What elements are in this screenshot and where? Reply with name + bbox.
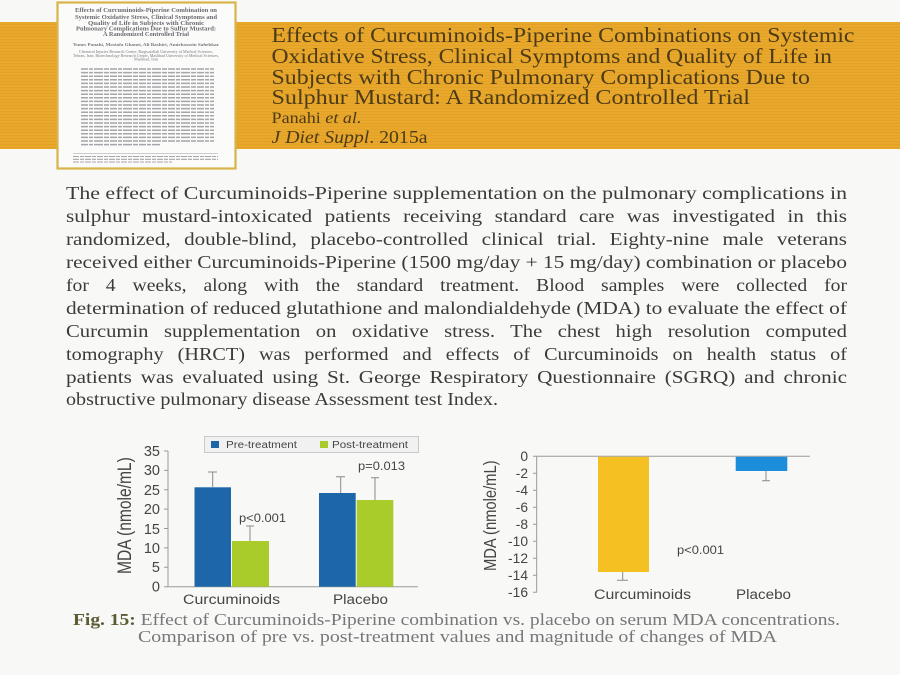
thumbnail authors <box>73 42 219 62</box>
body paragraph: determination of reduced glutathione and malondialdehyde (MDA) to evaluate the effect of <box>66 298 847 319</box>
y axis: -2 <box>516 466 528 481</box>
legend: Post-treatment <box>332 440 408 451</box>
x axis labels <box>183 592 388 607</box>
article title: Oxidative Stress, Clinical Symptoms and Quality of Life in <box>272 44 833 68</box>
body paragraph: The effect of Curcuminoids-Piperine supplementation on the pulmonary complications in <box>66 183 847 203</box>
y axis: 35 <box>144 444 160 460</box>
thumbnail authors: Mashhad, Iran <box>134 58 158 62</box>
thumbnail authors: Yunes Panahi, Mostafa Ghanei, Ali Bashiri, Amirhossein Sahebkar <box>73 42 219 47</box>
left bar chart: MDA pre vs post treatment <box>114 436 419 607</box>
y axis: 0 <box>520 449 528 464</box>
p-value: placebo: p=0.013 <box>358 461 405 473</box>
y axis: -4 <box>516 483 528 498</box>
y axis: -16 <box>508 585 528 600</box>
thumbnail footnote <box>73 154 218 162</box>
right bar chart: magnitude of changes in MDA <box>481 449 810 602</box>
article title: Sulphur Mustard: A Randomized Controlled Trial <box>272 85 750 109</box>
thumbnail abstract lines <box>81 69 214 145</box>
y axis: -8 <box>516 517 528 532</box>
thumbnail title <box>75 7 218 38</box>
y axis: 25 <box>144 483 160 499</box>
header band <box>0 22 900 149</box>
thumbnail title: A Randomized Controlled Trial <box>103 31 189 38</box>
p-value: curcuminoids: p<0.001 <box>239 513 286 525</box>
bars: Placebo <box>319 477 393 587</box>
bar: Curcuminoids <box>598 457 649 580</box>
body paragraph <box>66 183 847 409</box>
x axis labels: Placebo <box>333 592 388 607</box>
y axis: -14 <box>508 568 528 583</box>
body paragraph: received either Curcuminoids-Piperine (1500 mg/day + 15 mg/day) combination or placebo <box>66 252 847 273</box>
y axis <box>508 449 810 600</box>
y axis: 10 <box>144 541 160 557</box>
thumbnail title: Effects of Curcuminoids-Piperine Combination on <box>75 7 218 14</box>
thumbnail title: Systemic Oxidative Stress, Clinical Symptoms and <box>75 14 218 21</box>
body paragraph: patients was evaluated using St. George Respiratory Questionnaire (SGRQ) and chronic <box>66 367 847 388</box>
x axis labels <box>594 587 791 602</box>
bars: Curcuminoids <box>194 472 269 587</box>
y axis: 15 <box>144 522 160 538</box>
body paragraph: Curcumin supplementation on oxidative stress. The chest high resolution computed <box>66 321 847 341</box>
thumbnail title: Quality of Life in Subjects with Chronic <box>88 20 204 27</box>
body paragraph: randomized, double-blind, placebo-controlled clinical trial. Eighty-nine male veterans <box>66 229 847 249</box>
legend <box>204 436 418 452</box>
thumbnail authors: Chemical Injuries Research Center, Baqiyatallah University of Medical Sciences, <box>79 50 213 55</box>
article title: Effects of Curcuminoids-Piperine Combinations on Systemic <box>272 23 854 47</box>
bar: Placebo <box>736 457 787 481</box>
x axis labels: Curcuminoids <box>594 587 691 602</box>
x axis labels: Curcuminoids <box>183 592 280 607</box>
p-value: p<0.001 <box>677 545 724 557</box>
article thumbnail <box>58 2 236 168</box>
thumbnail title: Pulmonary Complications Due to Sulfur Mustard: <box>76 26 216 32</box>
article title: Subjects with Chronic Pulmonary Complications Due to <box>272 65 810 89</box>
y axis: 5 <box>152 560 160 576</box>
y axis: 20 <box>144 502 160 518</box>
figure caption: Fig. 15: Effect of Curcuminoids-Piperine combination vs. placebo on serum MDA concentrations. <box>73 610 840 629</box>
figure caption: Comparison of pre vs. post-treatment values and magnitude of changes of MDA <box>138 627 777 646</box>
y axis: -10 <box>508 534 528 549</box>
y axis: -6 <box>516 500 528 515</box>
figure caption <box>73 610 840 646</box>
y axis <box>144 444 418 596</box>
y axis: 30 <box>144 463 160 479</box>
y axis title: MDA (nmole/mL) <box>481 460 500 571</box>
x axis labels: Placebo <box>736 587 791 602</box>
thumbnail authors: Tehran, Iran; Biotechnology Research Center, Mashhad University of Medical Sciences, <box>73 54 219 59</box>
y axis: -12 <box>508 551 528 566</box>
y axis: 0 <box>152 580 160 596</box>
y axis title: MDA (nmole/mL) <box>114 457 135 574</box>
article title <box>272 23 854 109</box>
journal citation: J Diet Suppl . 2015a <box>272 127 428 147</box>
authors: Panahi et al. <box>272 110 362 127</box>
legend: Pre-treatment <box>226 440 297 451</box>
body paragraph: for 4 weeks, along with the standard treatment. Blood samples were collected for <box>66 275 847 295</box>
body paragraph: sulphur mustard-intoxicated patients receiving standard care was investigated in this <box>66 206 847 226</box>
body paragraph: tomography (HRCT) was performed and effects of Curcuminoids on health status of <box>66 344 847 365</box>
body paragraph: obstructive pulmonary disease Assessment test Index. <box>66 389 498 409</box>
